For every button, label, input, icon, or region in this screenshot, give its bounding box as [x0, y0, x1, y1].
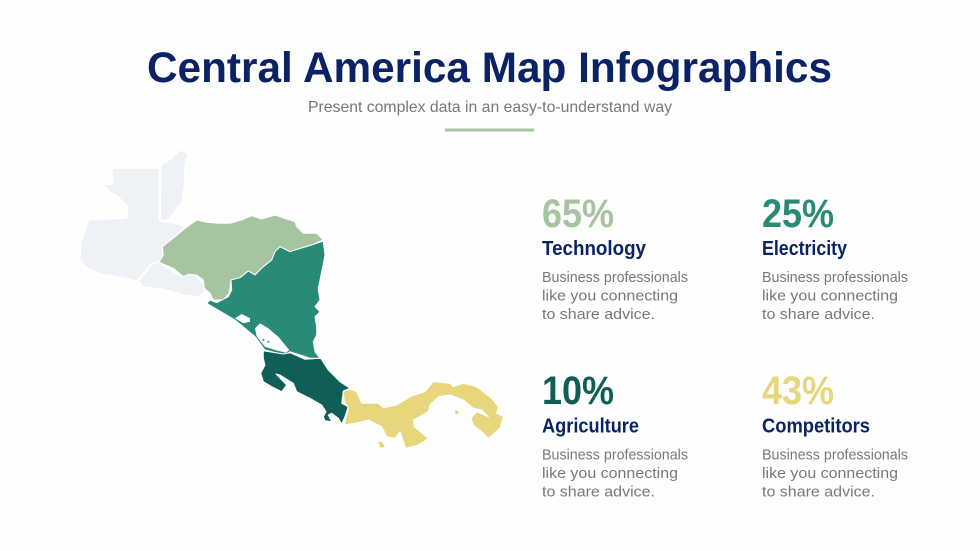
description: [762, 446, 908, 500]
country: Honduras: [159, 215, 323, 300]
description: to share advice.: [542, 484, 655, 500]
map of Central America: [80, 150, 503, 448]
description: to share advice.: [542, 306, 655, 323]
title: Central America Map Infographics: [147, 44, 832, 92]
country: Belize: [160, 150, 188, 221]
country: Costa Rica: [261, 351, 350, 424]
title underline: [445, 128, 534, 132]
lakes of Nicaragua: [235, 314, 289, 353]
description: [762, 269, 908, 323]
stat: Electricity: [762, 192, 908, 323]
percentage: 10%: [542, 369, 614, 413]
stat: Competitors: [762, 369, 908, 500]
stat: Technology: [542, 192, 688, 323]
country: Panama: [343, 382, 503, 448]
description: like you connecting: [542, 465, 678, 482]
description: Business professionals: [762, 269, 908, 286]
description: like you connecting: [762, 288, 898, 304]
country: El Salvador: [138, 262, 205, 297]
description: Business professionals: [542, 446, 688, 464]
stat: Agriculture: [542, 369, 688, 500]
heading: Technology: [542, 238, 647, 260]
country: Nicaragua: [207, 241, 325, 358]
percentage: 43%: [762, 369, 834, 413]
description: like you connecting: [542, 288, 678, 304]
heading: Competitors: [762, 416, 870, 438]
percentage: 25%: [762, 192, 834, 236]
description: Business professionals: [542, 269, 688, 286]
description: to share advice.: [762, 306, 875, 323]
country: Guatemala: [80, 168, 185, 281]
description: [542, 269, 688, 323]
description: [542, 446, 688, 500]
description: to share advice.: [762, 484, 875, 500]
percentage: 65%: [542, 192, 614, 236]
subtitle: Present complex data in an easy-to-understand way: [308, 99, 672, 116]
description: Business professionals: [762, 446, 908, 464]
heading: Agriculture: [542, 416, 639, 438]
description: like you connecting: [762, 465, 898, 482]
heading: Electricity: [762, 238, 848, 260]
